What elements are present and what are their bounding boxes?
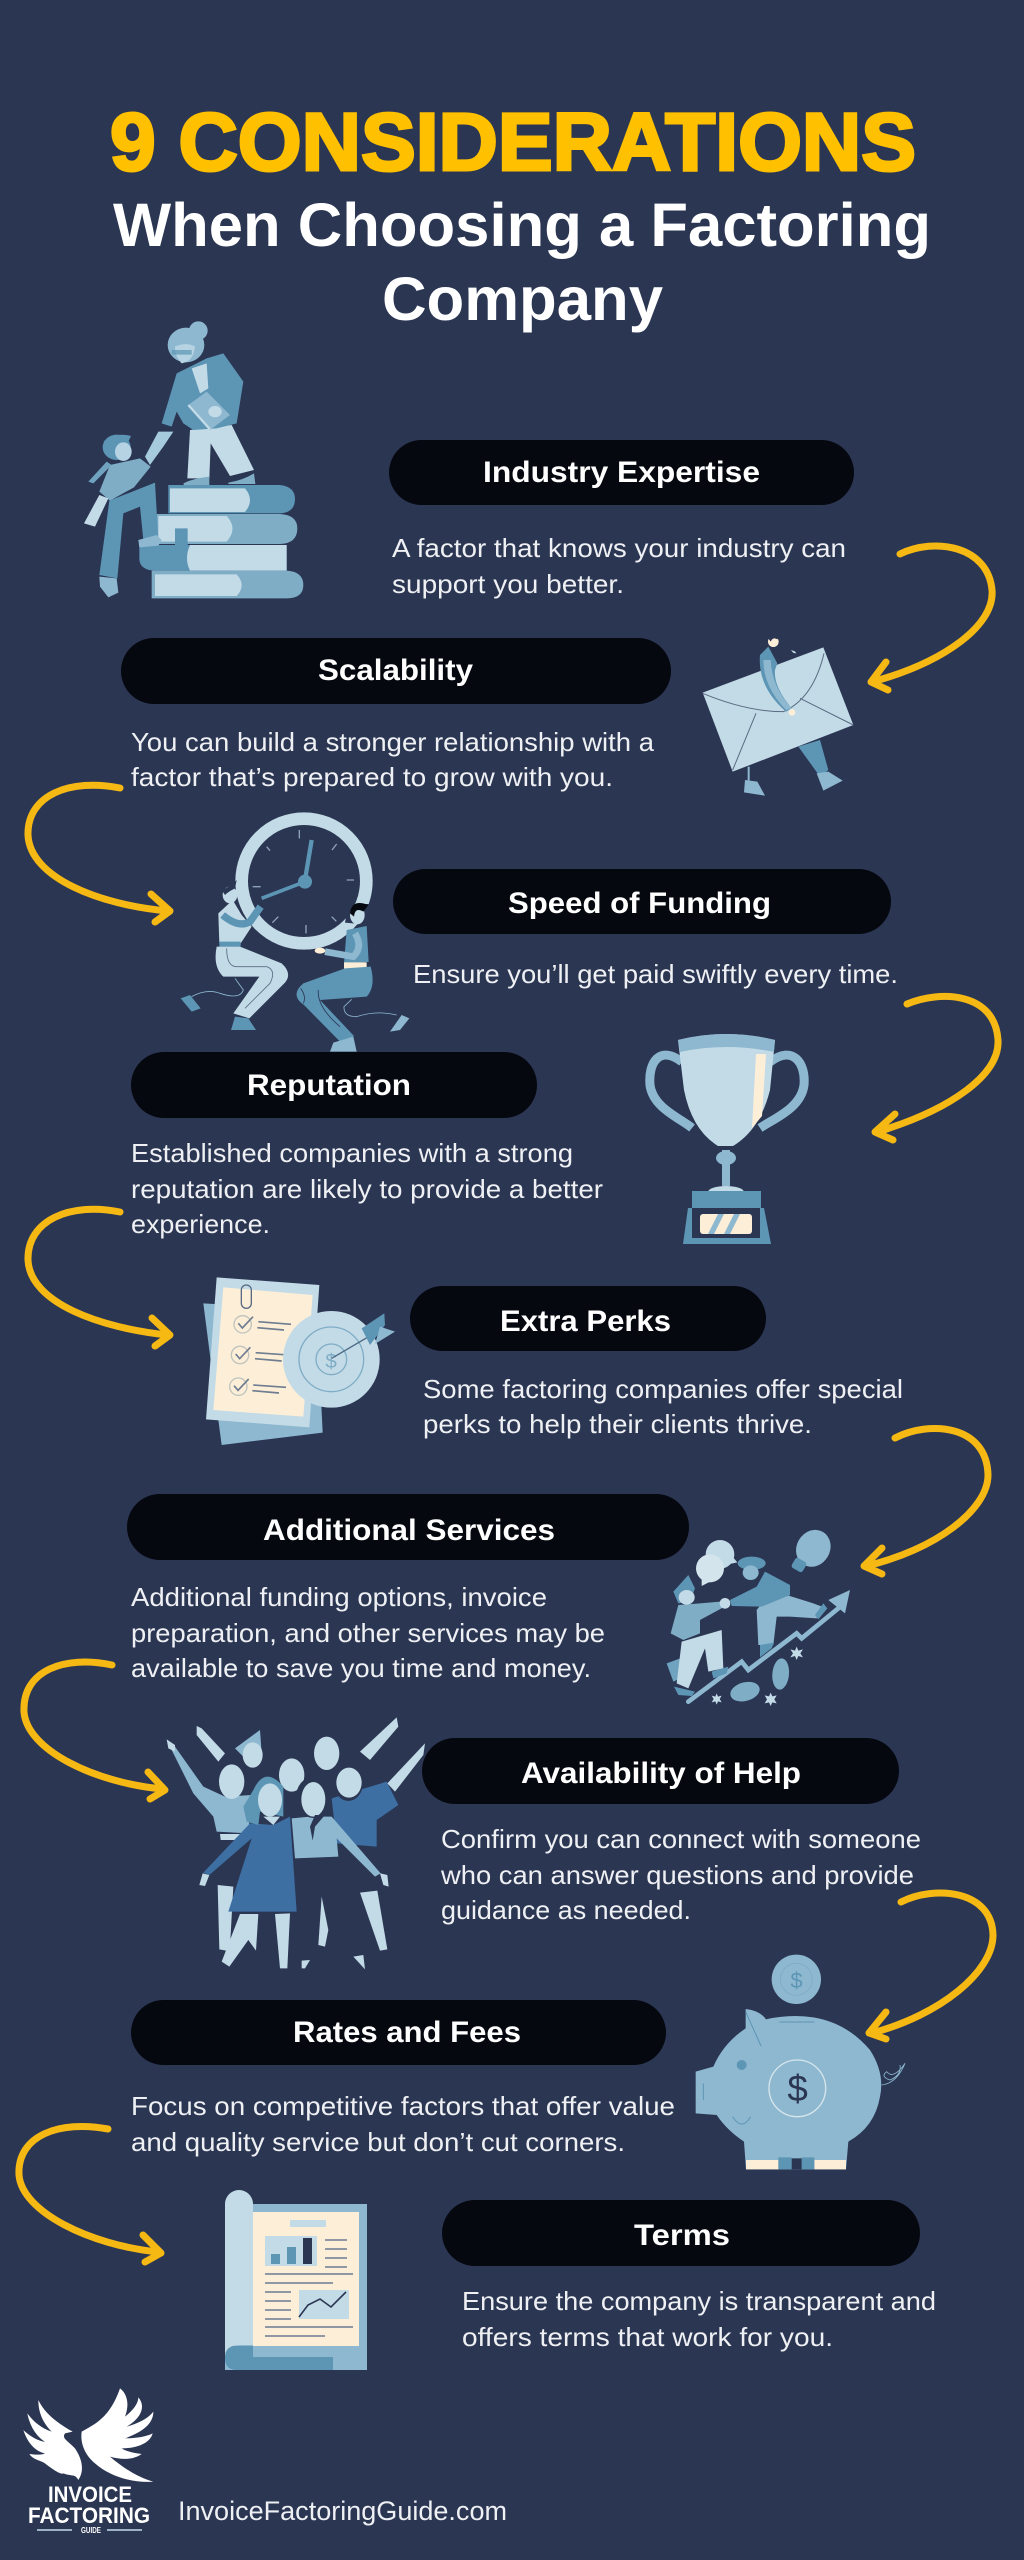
callout: additional services: Additional funding options, invoice (131, 1582, 547, 1612)
callout: additional services: available to save you time and money. (131, 1653, 591, 1683)
callout: speed of funding (393, 869, 898, 989)
callout: availability of help: Confirm you can connect with someone (441, 1824, 921, 1854)
callout: rates and fees (131, 2000, 675, 2157)
arrow (875, 996, 998, 1140)
callout: terms: offers terms that work for you. (462, 2322, 833, 2352)
callout: speed of funding: Speed of Funding (508, 887, 771, 920)
website url: InvoiceFactoringGuide.com (178, 2496, 507, 2526)
callout: scalability (121, 638, 671, 792)
arrow (871, 546, 992, 690)
callout: additional services: preparation, and other services may be (131, 1618, 605, 1648)
callout: extra perks: perks to help their clients thrive. (423, 1409, 812, 1439)
callout: rates and fees: and quality service but don’t cut corners. (131, 2127, 625, 2157)
icon: mentor helping child up a stack of books (84, 321, 303, 598)
icon: cheering crowd (167, 1717, 425, 1969)
callout: reputation: Reputation (247, 1069, 411, 1102)
callout: availability of help: guidance as needed. (441, 1895, 691, 1925)
callout: speed of funding: Ensure you’ll get paid swiftly every time. (413, 959, 898, 989)
icon: team climbing growth arrow (667, 1524, 850, 1706)
title (110, 97, 931, 333)
arrow (28, 785, 170, 922)
logo: Invoice Factoring Guide: FACTORING (28, 2503, 150, 2528)
callout: reputation: experience. (131, 1209, 270, 1239)
icon: piggy bank with coin (696, 1955, 905, 2169)
logo: Invoice Factoring Guide: INVOICE (48, 2482, 132, 2507)
callout: additional services: Additional Services (263, 1514, 555, 1547)
arrow (24, 1662, 165, 1799)
icon: person carrying envelope (703, 634, 853, 796)
callout: industry expertise: support you better. (392, 569, 624, 599)
icon: checklist and target: $ (325, 1350, 337, 1373)
icon: checklist and target (203, 1277, 395, 1445)
icon: trophy (650, 1034, 804, 1244)
arrow (864, 1428, 988, 1574)
callout: industry expertise: Industry Expertise (483, 456, 760, 489)
callout: terms: Terms (634, 2219, 730, 2252)
callout: rates and fees: Focus on competitive factors that offer value (131, 2091, 675, 2121)
callout: extra perks: Extra Perks (500, 1305, 671, 1338)
callout: extra perks (410, 1286, 903, 1439)
callout: reputation (131, 1052, 603, 1239)
logo: Invoice Factoring Guide: GUIDE (81, 2526, 102, 2535)
icon: piggy bank with coin: $ (790, 1968, 803, 1993)
title: Company (382, 265, 663, 333)
arrow (869, 1893, 993, 2039)
callout: industry expertise: A factor that knows your industry can (392, 533, 846, 563)
callout: availability of help (422, 1738, 921, 1925)
callout: availability of help: Availability of Help (521, 1757, 801, 1790)
callout: rates and fees: Rates and Fees (293, 2016, 521, 2049)
callout: scalability: factor that’s prepared to grow with you. (131, 762, 613, 792)
icon: report document (225, 2190, 367, 2370)
callout: reputation: reputation are likely to provide a better (131, 1174, 603, 1204)
callout: industry expertise (389, 440, 854, 599)
callout: extra perks: Some factoring companies offer special (423, 1374, 903, 1404)
callout: terms (442, 2200, 936, 2352)
callout: additional services (127, 1494, 689, 1683)
arrow (19, 2126, 161, 2262)
callout: reputation: Established companies with a strong (131, 1138, 573, 1168)
logo: Invoice Factoring Guide (23, 2388, 153, 2535)
callout: terms: Ensure the company is transparent and (462, 2286, 936, 2316)
callout: scalability: Scalability (318, 654, 473, 687)
arrow (28, 1209, 170, 1346)
icon: piggy bank with coin: $ (787, 2068, 808, 2109)
callout: availability of help: who can answer questions and provide (440, 1860, 914, 1890)
icon: people lifting clock (181, 819, 409, 1052)
callout: scalability: You can build a stronger relationship with a (131, 727, 655, 757)
title: 9 CONSIDERATIONS (110, 97, 916, 188)
title: When Choosing a Factoring (113, 191, 931, 259)
